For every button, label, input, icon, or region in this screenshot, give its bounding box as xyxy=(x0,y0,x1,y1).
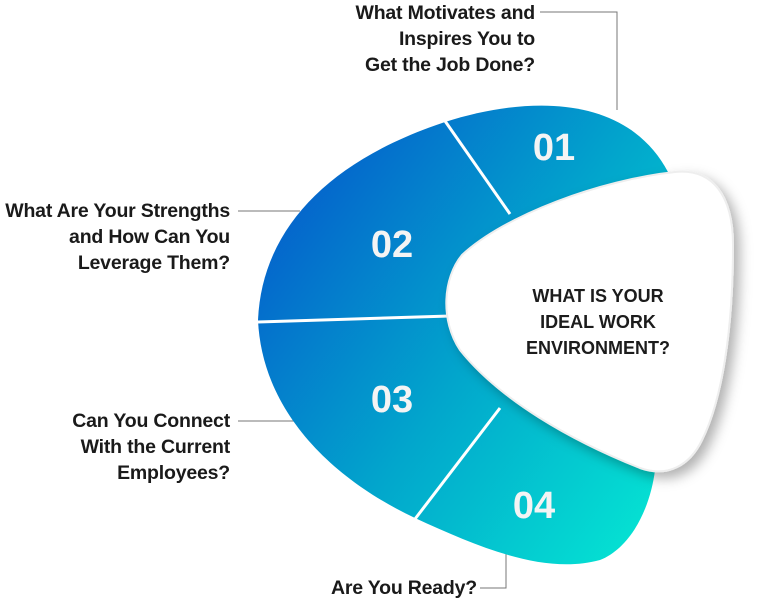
label 02: and How Can You xyxy=(69,226,230,248)
label 01: Inspires You to xyxy=(399,28,535,50)
outer segmented shape: 01 xyxy=(533,127,575,169)
outer segmented shape xyxy=(258,106,668,564)
center white shape: WHAT IS YOUR xyxy=(532,286,664,306)
label 01: Get the Job Done? xyxy=(365,54,535,76)
center white shape: IDEAL WORK xyxy=(540,312,656,332)
label 03: Employees? xyxy=(117,462,230,484)
connector lines xyxy=(238,12,617,588)
outer segmented shape: 03 xyxy=(371,379,413,421)
outer segmented shape: 04 xyxy=(513,485,555,527)
label 04: Are You Ready? xyxy=(331,577,477,599)
label 02: Leverage Them? xyxy=(78,252,230,274)
label 02 xyxy=(5,200,230,274)
label 03: With the Current xyxy=(81,436,230,458)
label 03 xyxy=(72,410,230,484)
label 01: What Motivates and xyxy=(356,2,535,24)
outer segmented shape: 02 xyxy=(371,224,413,266)
label 02: What Are Your Strengths xyxy=(5,200,230,222)
label 03: Can You Connect xyxy=(72,410,230,432)
center white shape: ENVIRONMENT? xyxy=(526,338,670,358)
label 01 xyxy=(356,2,535,76)
center white shape xyxy=(446,172,733,471)
